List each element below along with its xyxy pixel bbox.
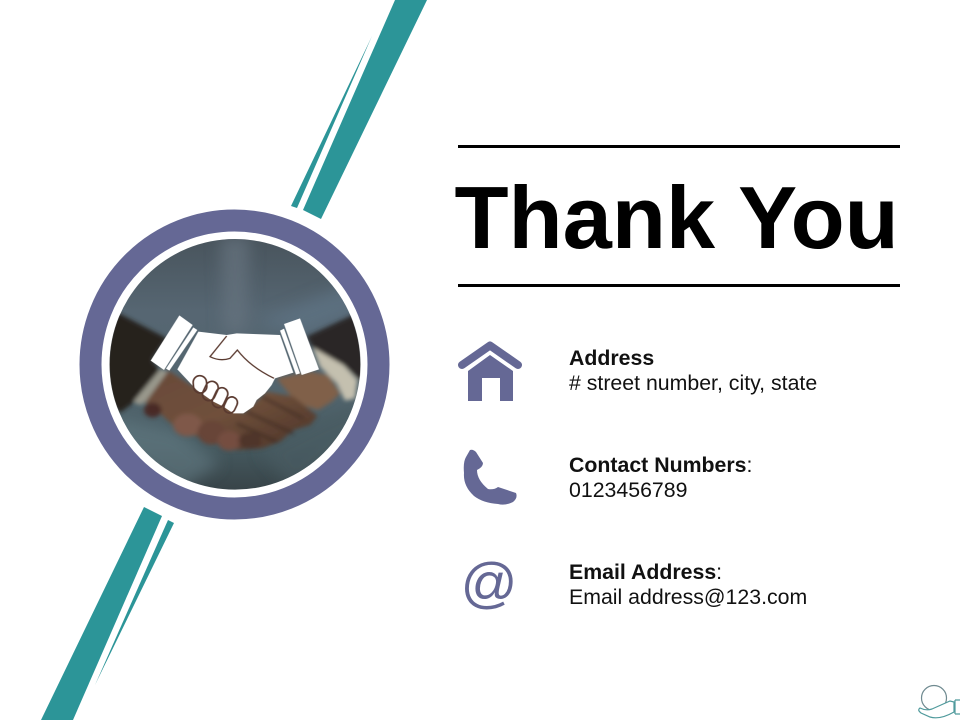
bottom thin teal stripe [95, 520, 174, 685]
top large teal stripe [303, 0, 427, 219]
clasped hands [177, 332, 293, 413]
icon: telephone [464, 450, 517, 505]
icon: at sign: @ [461, 551, 517, 614]
left cuff [151, 315, 193, 370]
lower fingers [173, 414, 202, 436]
bottom rule [458, 284, 900, 287]
contact numbers text: Contact Numbers: [569, 453, 752, 477]
left shirt cuff [133, 369, 168, 405]
left hand back [145, 371, 317, 450]
left dark sleeve [103, 310, 167, 413]
contact numbers text [569, 453, 752, 502]
address text: Address [569, 346, 654, 370]
icon: logo hand holding globe [919, 686, 960, 718]
top thin teal stripe [291, 36, 372, 208]
title: Thank You [454, 168, 899, 266]
address text [569, 346, 817, 395]
email text: Email address@123.com [569, 585, 807, 609]
bottom large teal stripe [41, 507, 162, 720]
right cuff [284, 318, 319, 375]
contact numbers text: 0123456789 [569, 478, 687, 502]
right shirt cuff [313, 347, 357, 401]
right dark sleeve [307, 310, 367, 387]
address text: # street number, city, state [569, 371, 817, 395]
finger outlines [193, 375, 239, 415]
handshake photo [110, 239, 361, 490]
purple ring [90, 220, 378, 508]
light background bands [113, 237, 360, 490]
top rule [458, 145, 900, 148]
icon: house [462, 346, 518, 401]
email text: Email Address: [569, 560, 722, 584]
finger shadows [237, 397, 303, 442]
left pinky tip [144, 403, 161, 417]
email text [569, 560, 807, 609]
white handshake icon [151, 315, 319, 415]
thumb outline [210, 336, 274, 378]
right hand back [277, 372, 340, 410]
